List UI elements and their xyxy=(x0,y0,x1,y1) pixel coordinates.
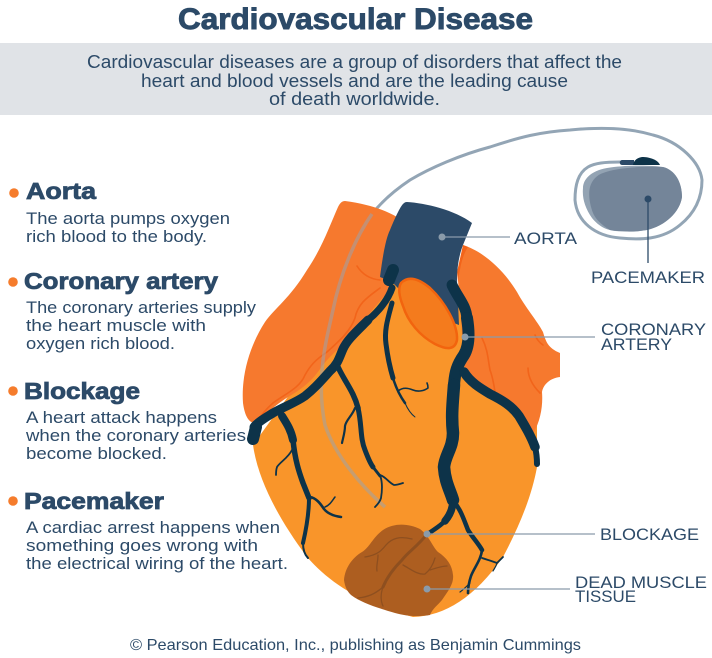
label: pacemaker xyxy=(591,196,705,287)
text block: blockage: when the coronary arteries xyxy=(25,426,246,445)
text block: coronary artery: oxygen rich blood. xyxy=(26,334,175,353)
pacemaker wire over heart xyxy=(321,214,385,507)
left atrium xyxy=(243,201,397,423)
text block: pacemaker: Pacemaker xyxy=(24,488,164,514)
aorta xyxy=(380,202,472,325)
text block: coronary artery xyxy=(8,268,257,353)
pacemaker xyxy=(583,157,682,232)
label: dead muscle tissue: TISSUE xyxy=(575,587,636,606)
text block: coronary artery: the heart muscle with xyxy=(26,316,206,335)
text block: pacemaker: A cardiac arrest happens when xyxy=(26,518,280,537)
heart body xyxy=(253,280,537,617)
coronary arteries xyxy=(253,270,537,593)
text block: aorta: Aorta xyxy=(26,178,96,204)
dead muscle tissue xyxy=(344,525,453,616)
label: dead muscle tissue xyxy=(424,573,707,606)
text block: blockage xyxy=(8,378,246,463)
right atrium xyxy=(458,245,560,434)
text block: pacemaker: something goes wrong with xyxy=(26,536,258,555)
label: aorta: AORTA xyxy=(514,229,578,248)
title: Cardiovascular Disease xyxy=(178,3,533,36)
atrium veins xyxy=(257,266,543,422)
text block: coronary artery: The coronary arteries supply xyxy=(26,298,257,317)
label: coronary artery: ARTERY xyxy=(601,335,672,354)
tissue veins xyxy=(358,534,447,606)
text block: pacemaker xyxy=(8,488,288,573)
intro band: Cardiovascular diseases are a group of disorders that affect the xyxy=(87,52,622,72)
label: pacemaker: PACEMAKER xyxy=(591,268,705,287)
heart illustration xyxy=(243,201,560,617)
intro band xyxy=(0,43,712,115)
intro band: heart and blood vessels and are the leading cause xyxy=(141,71,568,91)
text block: blockage: Blockage xyxy=(24,378,140,404)
pacemaker wire outside heart xyxy=(372,128,702,239)
label: coronary artery: CORONARY xyxy=(601,320,706,339)
intro band: of death worldwide. xyxy=(269,89,440,109)
label: dead muscle tissue: DEAD MUSCLE xyxy=(575,573,707,592)
text block: aorta: The aorta pumps oxygen xyxy=(26,209,230,228)
label: blockage xyxy=(424,525,699,544)
text block: aorta xyxy=(9,178,230,246)
aorta valve xyxy=(399,279,457,348)
label: blockage: BLOCKAGE xyxy=(600,525,699,544)
text block: blockage: A heart attack happens xyxy=(26,408,217,427)
label: coronary artery xyxy=(462,320,706,354)
text block: pacemaker: the electrical wiring of the heart. xyxy=(26,554,288,573)
text block: coronary artery: Coronary artery xyxy=(24,268,218,294)
label: aorta xyxy=(438,229,578,248)
footer credit: © Pearson Education, Inc., publishing as Benjamin Cummings xyxy=(130,637,581,654)
text block: blockage: become blocked. xyxy=(26,444,167,463)
text block: aorta: rich blood to the body. xyxy=(26,227,207,246)
